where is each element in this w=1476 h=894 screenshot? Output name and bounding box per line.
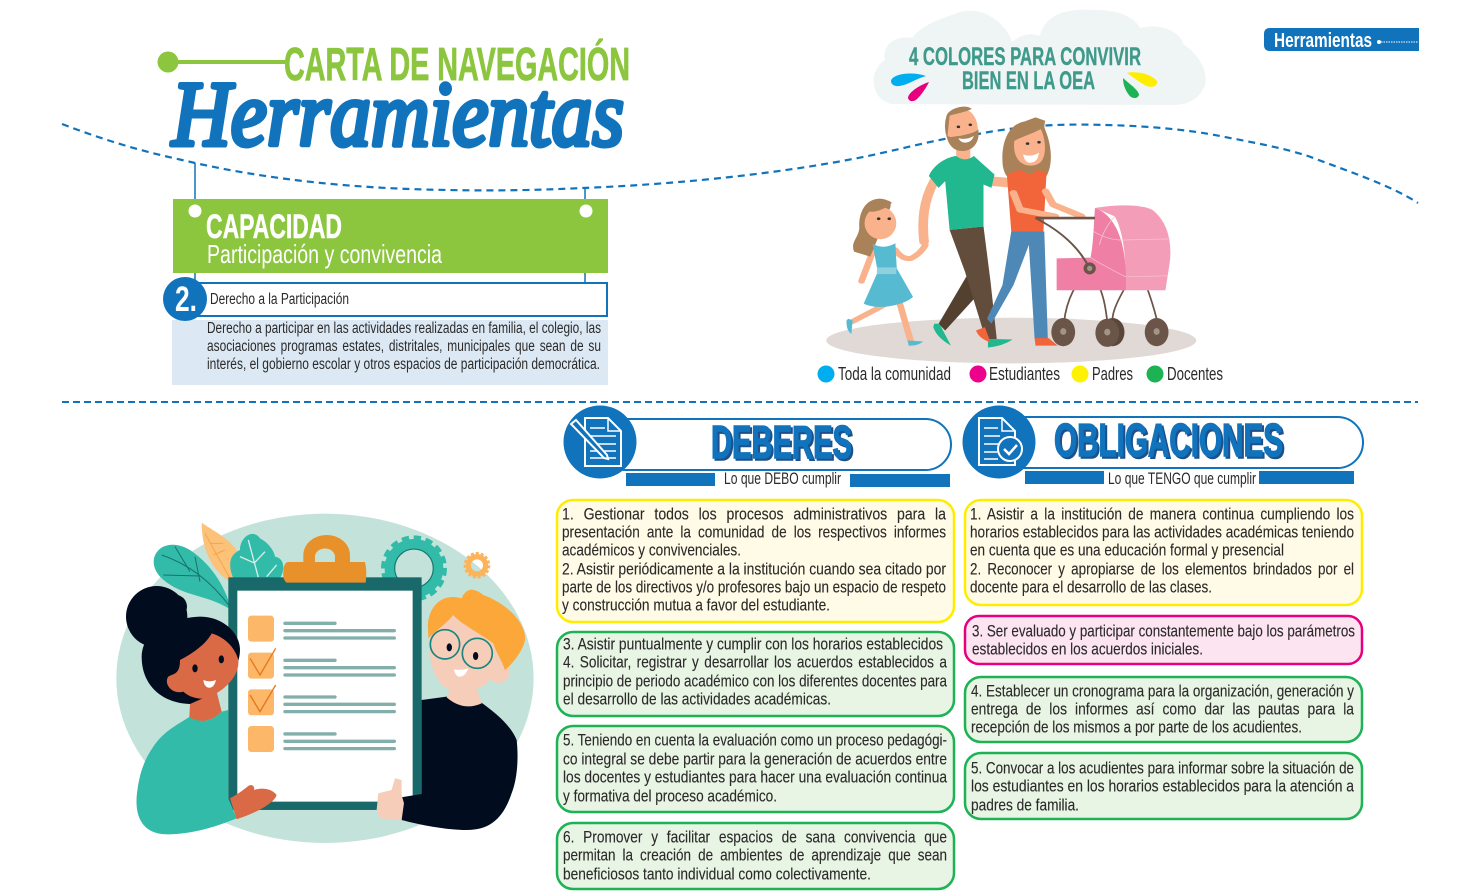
box: obligaciones 4: 4. Establecer un cronograma para la organización, generación y bbox=[971, 682, 1355, 700]
box: obligaciones 4 bbox=[965, 677, 1362, 742]
box: deberes 6: permitan la creación de ambientes de aprendizaje que sean bbox=[563, 846, 947, 864]
box: obligaciones 5: los estudiantes en los horarios establecidos para la atención a bbox=[971, 778, 1355, 796]
woman bbox=[976, 117, 1082, 346]
cloud: 4 colores bbox=[874, 10, 1206, 105]
cloud: 4 colores: BIEN EN LA OEA bbox=[962, 67, 1095, 95]
box: obligaciones 3 bbox=[965, 616, 1362, 664]
panel: derecho a la participación: Derecho a participar en las actividades realizadas en familia, el colegio, las bbox=[207, 320, 601, 337]
panel: derecho a la participación: interés, el gobierno escolar y otros espacios de participación democrática. bbox=[207, 356, 600, 373]
box: deberes 3-4 bbox=[557, 632, 954, 716]
box: deberes 5: 5. Teniendo en cuenta la evaluación como un proceso pedagógi- bbox=[563, 732, 947, 750]
panel: capacidad: Participación y convivencia bbox=[207, 239, 442, 269]
header: obligaciones: Lo que TENGO que cumplir bbox=[1108, 470, 1256, 488]
box: obligaciones 5: padres de familia. bbox=[971, 796, 1079, 814]
panel: derecho a la participación: asociaciones programas estates, distritales, municipales que sean de su bbox=[207, 338, 601, 355]
panel: derecho a la participación: Derecho a la Participación bbox=[210, 291, 349, 308]
gears bbox=[383, 538, 489, 599]
box: deberes 3-4: principio de periodo académico con los diferentes docentes para bbox=[563, 672, 948, 690]
box: deberes 1-2 bbox=[557, 500, 954, 622]
box: obligaciones 1-2: horarios establecidos para las actividades académicas teniendo bbox=[970, 524, 1354, 542]
leaves bbox=[154, 523, 283, 610]
stroller bbox=[1035, 205, 1170, 347]
box: obligaciones 5 bbox=[965, 753, 1362, 819]
clipboard bbox=[228, 535, 422, 810]
box: deberes 3-4: el desarrollo de las actividades académicas. bbox=[563, 690, 831, 708]
title: Herramientas: Herramientas bbox=[171, 63, 624, 165]
header: deberes: Lo que DEBO cumplir bbox=[724, 470, 841, 488]
girl bbox=[846, 199, 925, 346]
legend: colours: Docentes bbox=[1167, 364, 1223, 384]
woman bbox=[126, 586, 277, 834]
man bbox=[377, 590, 525, 830]
box: deberes 6: beneficiosos tanto individual como colectivamente. bbox=[563, 866, 871, 884]
title: carta de navegación: CARTA DE NAVEGACIÓN bbox=[284, 38, 630, 90]
tab: Herramientas: Herramientas bbox=[1274, 30, 1372, 52]
box: deberes 1-2: presentación ante la comunidad de los respectivos informes bbox=[562, 524, 946, 542]
panel: capacidad bbox=[173, 163, 608, 284]
panel: capacidad: CAPACIDAD bbox=[206, 208, 342, 246]
box: deberes 1-2: parte de los directivos y/o profesores bajo un espacio de respeto bbox=[562, 578, 946, 596]
box: deberes 5: los docentes y estudiantes para hacer una evaluación continua bbox=[563, 768, 948, 786]
checklist bbox=[248, 616, 394, 752]
illustration: family walking with stroller bbox=[826, 107, 1196, 363]
box: deberes 3-4: 4. Solicitar, registrar y desarrollar los acuerdos establecidos a bbox=[563, 654, 948, 672]
box: obligaciones 1-2: en cuenta que es una educación formal y presencial bbox=[970, 542, 1284, 560]
box: deberes 5 bbox=[557, 726, 954, 812]
header: deberes: DEBERES bbox=[711, 416, 852, 468]
cloud: 4 colores: 4 COLORES PARA CONVIVIR bbox=[909, 43, 1141, 71]
legend: colours: Toda la comunidad bbox=[838, 364, 951, 384]
illustration: two people holding a clipboard bbox=[116, 514, 534, 843]
box: deberes 3-4: 3. Asistir puntualmente y cumplir con los horarios establecidos bbox=[563, 636, 943, 654]
legend: colours bbox=[818, 364, 1223, 384]
box: obligaciones 1-2 bbox=[965, 500, 1362, 605]
box: obligaciones 5: 5. Convocar a los acudientes para informar sobre la situación de bbox=[971, 760, 1354, 778]
box: obligaciones 3: establecidos en los acuerdos iniciales. bbox=[972, 640, 1203, 658]
icon: document and check bbox=[962, 406, 1036, 478]
legend: colours: Estudiantes bbox=[989, 364, 1060, 384]
man bbox=[923, 107, 1013, 348]
box: obligaciones 4: entrega de los informes así como dar las pautas para la bbox=[971, 700, 1355, 718]
box: deberes 1-2: académicos y convivenciales. bbox=[562, 542, 741, 560]
box: obligaciones 1-2: docente para el desarrollo de las clases. bbox=[970, 578, 1212, 596]
icon: document and pencil bbox=[564, 406, 636, 478]
box: obligaciones 4: recepción de los mismos a por parte de los acudientes. bbox=[971, 718, 1302, 736]
box: deberes 1-2: 2. Asistir periódicamente a la institución cuando sea citado por bbox=[562, 560, 946, 578]
header: deberes bbox=[564, 406, 951, 488]
box: deberes 1-2: y construcción mutua a favor del estudiante. bbox=[562, 596, 830, 614]
header: obligaciones: OBLIGACIONES bbox=[1054, 414, 1283, 466]
title: carta de navegación bbox=[158, 38, 630, 90]
box: obligaciones 1-2: 2. Reconocer y apropiarse de los elementos brindados por el bbox=[970, 560, 1354, 578]
box: obligaciones 1-2: 1. Asistir a la institución de manera continua cumpliendo los bbox=[970, 506, 1354, 524]
header: obligaciones bbox=[962, 406, 1363, 488]
panel: derecho a la participación: 2. bbox=[175, 280, 197, 319]
box: deberes 6 bbox=[557, 823, 954, 889]
panel: derecho a la participación bbox=[163, 277, 608, 385]
box: deberes 5: y formativa del proceso académico. bbox=[563, 788, 777, 806]
box: obligaciones 3: 3. Ser evaluado y participar constantemente bajo los parámetros bbox=[972, 622, 1355, 640]
box: deberes 5: co integral se debe partir para la generación de acuerdos entre bbox=[563, 750, 947, 768]
box: deberes 6: 6. Promover y facilitar espacios de sana convivencia que bbox=[563, 828, 947, 846]
legend: colours: Padres bbox=[1092, 364, 1133, 384]
box: deberes 1-2: 1. Gestionar todos los procesos administrativos para la bbox=[562, 506, 947, 524]
